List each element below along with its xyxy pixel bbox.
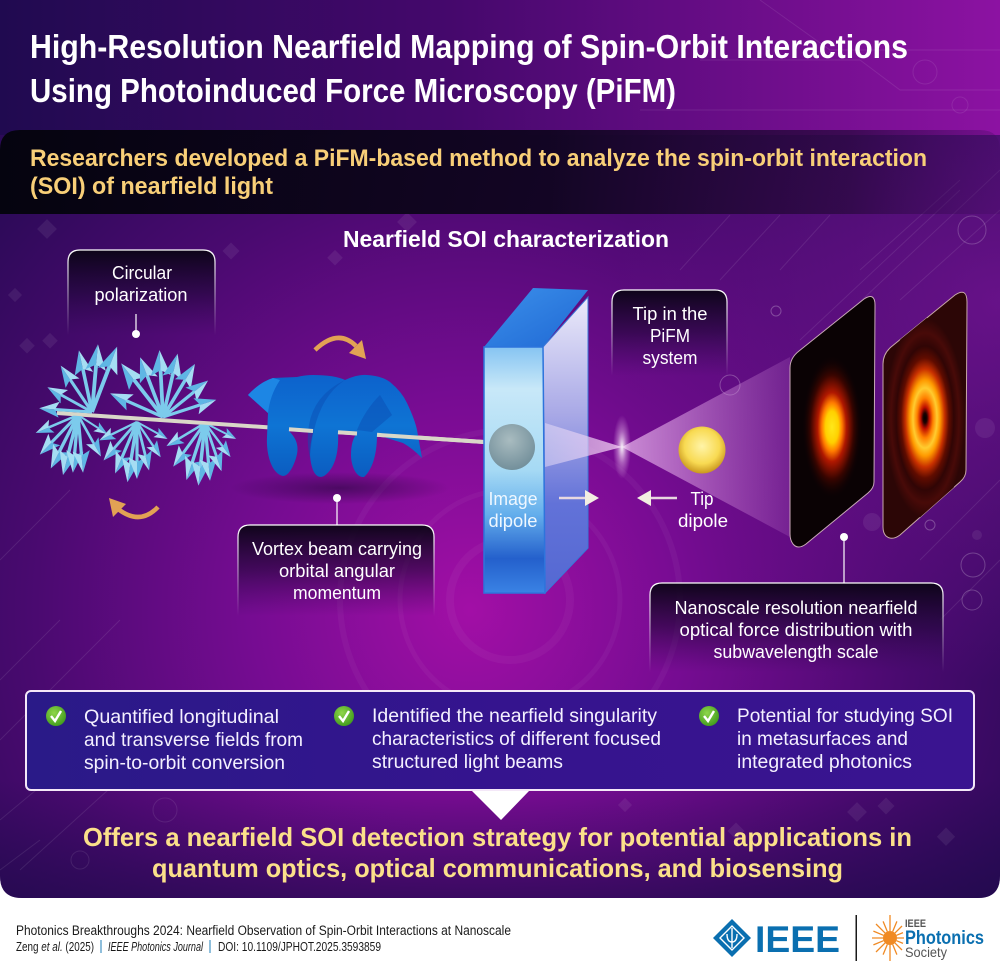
section heading: Nearfield SOI characterization bbox=[343, 226, 669, 252]
callout: nanoscale resolution: optical force distribution with bbox=[680, 620, 912, 640]
footer citation: Photonics Breakthroughs 2024: Nearfield Observation of Spin-Orbit Interactions at Nanoscale bbox=[16, 923, 511, 938]
light cone bbox=[545, 357, 790, 537]
IEEE logo: IEEE bbox=[755, 919, 840, 960]
subtitle text: Researchers developed a PiFM-based method to analyze the spin-orbit interaction bbox=[30, 145, 927, 172]
image dipole label: dipole bbox=[488, 511, 538, 531]
beam line bbox=[57, 413, 484, 442]
arrow: tip dipole bbox=[637, 490, 677, 506]
finding 3 bbox=[699, 705, 953, 773]
subtitle text bbox=[30, 145, 927, 200]
icon: vortex beam bbox=[248, 375, 484, 477]
finding 2: Identified the nearfield singularity bbox=[372, 705, 657, 727]
tip dipole label bbox=[678, 489, 728, 531]
title: High-Resolution Nearfield Mapping of Spin-Orbit Interactions bbox=[30, 28, 908, 65]
callout: nanoscale resolution: Nanoscale resolution nearfield bbox=[674, 598, 918, 618]
icon: circular polarization arrows bbox=[33, 343, 260, 487]
logo divider bbox=[856, 915, 857, 961]
shadow under vortex bbox=[230, 472, 450, 504]
conclusion bbox=[83, 822, 912, 883]
footer citation bbox=[16, 923, 511, 954]
tip dipole sphere bbox=[678, 426, 726, 474]
callout: vortex beam: momentum bbox=[293, 583, 381, 603]
finding 2 bbox=[334, 705, 661, 773]
finding 1: and transverse fields from bbox=[84, 729, 303, 751]
prism block bbox=[484, 288, 588, 593]
finding 1: Quantified longitudinal bbox=[84, 706, 279, 728]
arrow: rotation top bbox=[315, 338, 366, 359]
heat map: donut spot bbox=[883, 292, 967, 538]
finding 1: spin-to-orbit conversion bbox=[84, 752, 285, 774]
arrow: image dipole bbox=[559, 490, 599, 506]
callout: circular polarization: Circular bbox=[112, 263, 172, 283]
title bbox=[30, 28, 908, 109]
finding 3: in metasurfaces and bbox=[737, 728, 908, 750]
arrow: rotation bottom bbox=[109, 498, 158, 517]
heat map: solid spot bbox=[790, 297, 875, 547]
callout: circular polarization: polarization bbox=[94, 285, 188, 305]
callout: vortex beam: Vortex beam carrying bbox=[252, 539, 422, 559]
image dipole label bbox=[488, 489, 538, 531]
IEEE Photonics Society logo: IEEE bbox=[905, 918, 926, 930]
footer citation: Zeng et al. (2025) bbox=[16, 939, 94, 954]
finding 2: characteristics of different focused bbox=[372, 728, 661, 750]
subtitle text: (SOI) of nearfield light bbox=[30, 173, 273, 200]
footer citation: DOI: 10.1109/JPHOT.2025.3593859 bbox=[218, 939, 381, 954]
callout: tip in the PiFM system bbox=[612, 290, 727, 376]
finding 2: structured light beams bbox=[372, 751, 563, 773]
findings panel bbox=[26, 691, 974, 790]
callout: circular polarization bbox=[68, 250, 215, 338]
finding 1 bbox=[46, 706, 303, 774]
arrow: panel pointer bbox=[472, 791, 529, 820]
image dipole sphere bbox=[489, 424, 535, 470]
footer citation: IEEE Photonics Journal bbox=[108, 939, 204, 954]
callout: vortex beam: orbital angular bbox=[279, 561, 395, 581]
finding 3: Potential for studying SOI bbox=[737, 705, 953, 727]
callout: nanoscale resolution bbox=[650, 533, 943, 672]
callout: tip in the PiFM system: PiFM bbox=[650, 326, 690, 346]
subtitle band bbox=[0, 130, 1000, 214]
conclusion: Offers a nearfield SOI detection strategy for potential applications in bbox=[83, 822, 912, 852]
callout: vortex beam bbox=[238, 494, 434, 616]
finding 3: integrated photonics bbox=[737, 751, 912, 773]
tip dipole label: Tip bbox=[690, 489, 714, 509]
IEEE Photonics Society logo: Society bbox=[905, 944, 947, 960]
conclusion: quantum optics, optical communications, and biosensing bbox=[152, 853, 843, 883]
tip dipole label: dipole bbox=[678, 511, 728, 531]
IEEE Photonics Society logo bbox=[872, 915, 984, 961]
callout: tip in the PiFM system: system bbox=[642, 348, 698, 368]
callout: nanoscale resolution: subwavelength scale bbox=[714, 642, 878, 662]
title: Using Photoinduced Force Microscopy (PiFM) bbox=[30, 72, 676, 109]
callout: tip in the PiFM system: Tip in the bbox=[632, 304, 708, 324]
IEEE logo bbox=[713, 919, 840, 960]
IEEE Photonics Society logo: Photonics bbox=[905, 928, 984, 949]
image dipole label: Image bbox=[488, 489, 538, 509]
